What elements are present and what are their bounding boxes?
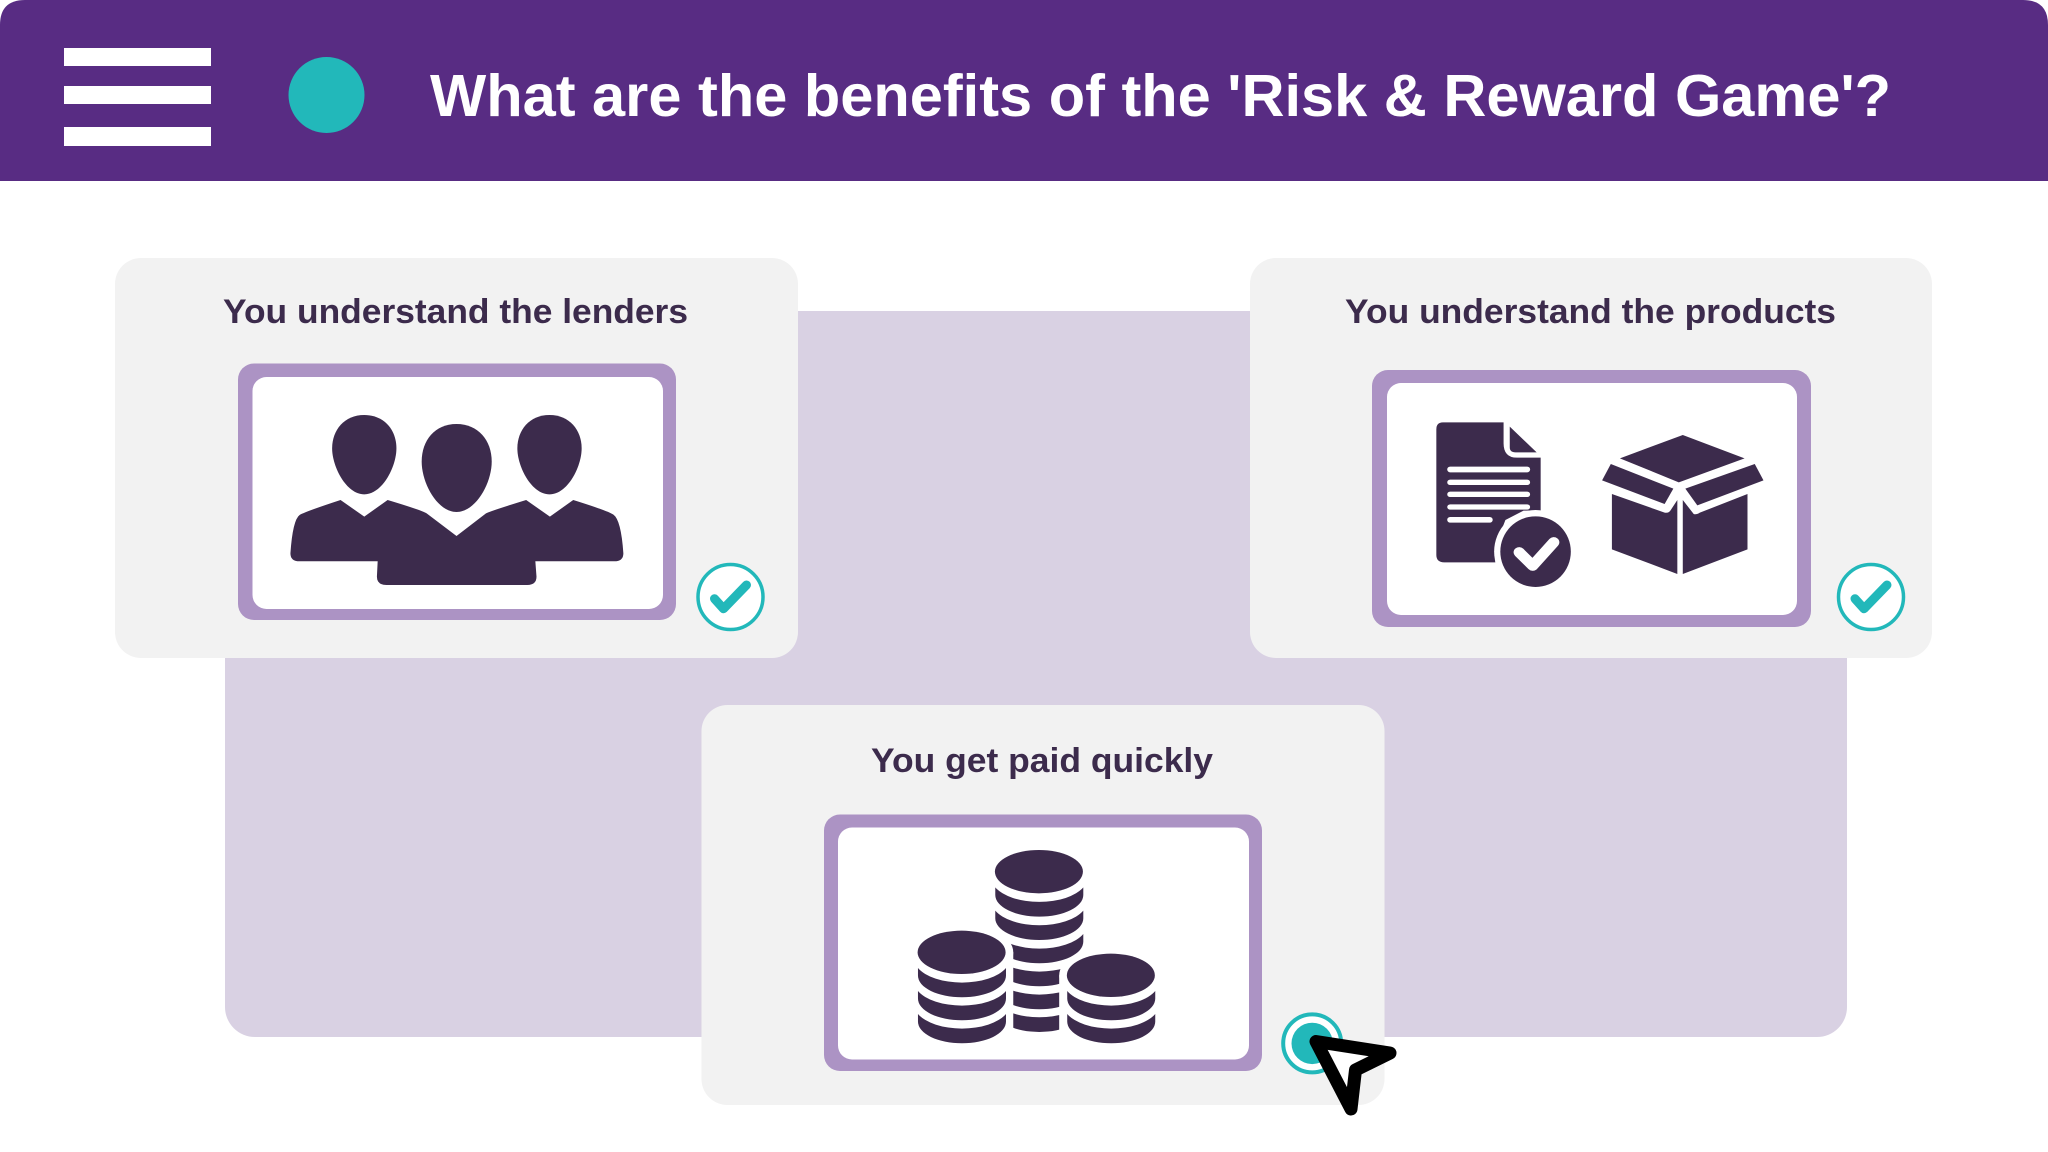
- icon: document with check: [1436, 422, 1585, 593]
- title: What are the benefits of the 'Risk & Reward Game'?: [430, 63, 1891, 129]
- heading: paid quickly: You get paid quickly: [871, 742, 1213, 780]
- panel: you understand the products: [1250, 258, 1932, 658]
- icon: teal status dot: [288, 57, 364, 133]
- lilac background panel: [225, 311, 1847, 1037]
- image frame: lenders: [238, 364, 676, 620]
- panel: you understand the lenders: [115, 258, 798, 658]
- icon: mouse cursor arrow: [1316, 1042, 1390, 1109]
- image frame: paid quickly: [824, 814, 1262, 1071]
- icon: open box: [1602, 435, 1763, 574]
- icon: three people: [290, 415, 623, 585]
- image frame: products: [1372, 370, 1811, 627]
- icon: teal radio button: [1283, 1014, 1341, 1072]
- header bar: [0, 0, 2048, 181]
- icon: teal check badge: [698, 564, 763, 630]
- panel: you get paid quickly: [702, 705, 1384, 1105]
- icon: teal check badge: [1838, 564, 1904, 630]
- icon: hamburger menu: [64, 48, 211, 146]
- icon: coin stacks: [910, 850, 1163, 1049]
- heading: lenders: You understand the lenders: [223, 293, 688, 331]
- heading: products: You understand the products: [1345, 293, 1836, 331]
